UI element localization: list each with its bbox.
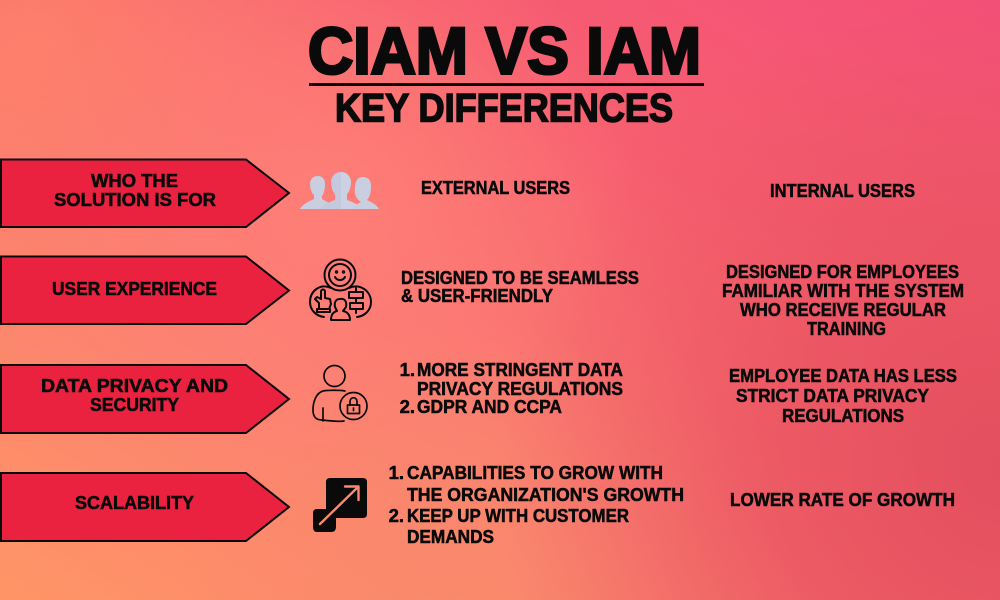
text: CIAM scalability: THE ORGANIZATION'S GROWTH [407,484,684,505]
arrow label: scalability [1,473,289,541]
text: CIAM privacy: GDPR AND CCPA [417,396,562,417]
subtitle: key differences: KEY DIFFERENCES [335,86,673,130]
row 1: who the solution is for [1,160,915,227]
arrow label: data privacy and security: SECURITY [90,394,180,415]
text: CIAM privacy: PRIVACY REGULATIONS [417,378,623,399]
text: IAM privacy [729,365,957,426]
text: CIAM privacy: 1. [400,359,415,380]
text: IAM experience: DESIGNED FOR EMPLOYEES [726,261,959,282]
text: IAM scalability: LOWER RATE OF GROWTH [730,489,955,510]
text: CIAM scalability: KEEP UP WITH CUSTOMER [407,505,629,526]
arrow label: who the solution is for: SOLUTION IS FOR [54,189,216,210]
text: IAM experience [722,261,964,339]
row 3: data privacy and security [1,359,957,433]
text: IAM experience: WHO RECEIVE REGULAR [740,299,946,320]
text: CIAM scalability [389,462,684,547]
text: CIAM scalability: CAPABILITIES TO GROW WITH [407,462,663,483]
icon: smiley, hand, person and chart [310,260,371,320]
text: IAM privacy: REGULATIONS [782,405,904,426]
text: CIAM privacy: 2. [400,396,415,417]
arrow label: who the solution is for: WHO THE [91,170,178,191]
text: IAM privacy: EMPLOYEE DATA HAS LESS [729,365,957,386]
arrow label: who the solution is for [1,160,289,227]
text: CIAM privacy [400,359,623,417]
text: CIAM experience: & USER-FRIENDLY [401,285,554,306]
text: CIAM experience [401,267,639,306]
icon: group of users [300,172,379,209]
arrow label: data privacy and security: DATA PRIVACY AND [41,375,228,396]
arrow label: user experience [1,256,289,324]
text: IAM privacy: STRICT DATA PRIVACY [736,385,930,406]
title underline [309,83,704,86]
text: CIAM scalability: 1. [389,462,404,483]
icon: scale-up arrow [313,478,367,532]
arrow label: scalability: SCALABILITY [75,492,195,513]
row 2: user experience [1,256,964,339]
text: CIAM scalability: DEMANDS [407,526,494,547]
text: CIAM scalability: 2. [389,505,404,526]
text: IAM experience: FAMILIAR WITH THE SYSTEM [722,280,964,301]
row 4: scalability [1,462,955,547]
text: CIAM experience: DESIGNED TO BE SEAMLESS [401,267,639,288]
icon: user with padlock [313,366,367,421]
arrow label: user experience: USER EXPERIENCE [52,278,217,299]
text: IAM audience: INTERNAL USERS [770,180,915,201]
text: IAM experience: TRAINING [807,318,886,339]
text: CIAM audience: EXTERNAL USERS [421,177,570,198]
text: CIAM privacy: MORE STRINGENT DATA [417,359,623,380]
title: CIAM VS IAM: CIAM VS IAM [308,14,701,88]
arrow label: data privacy and security [1,365,289,433]
